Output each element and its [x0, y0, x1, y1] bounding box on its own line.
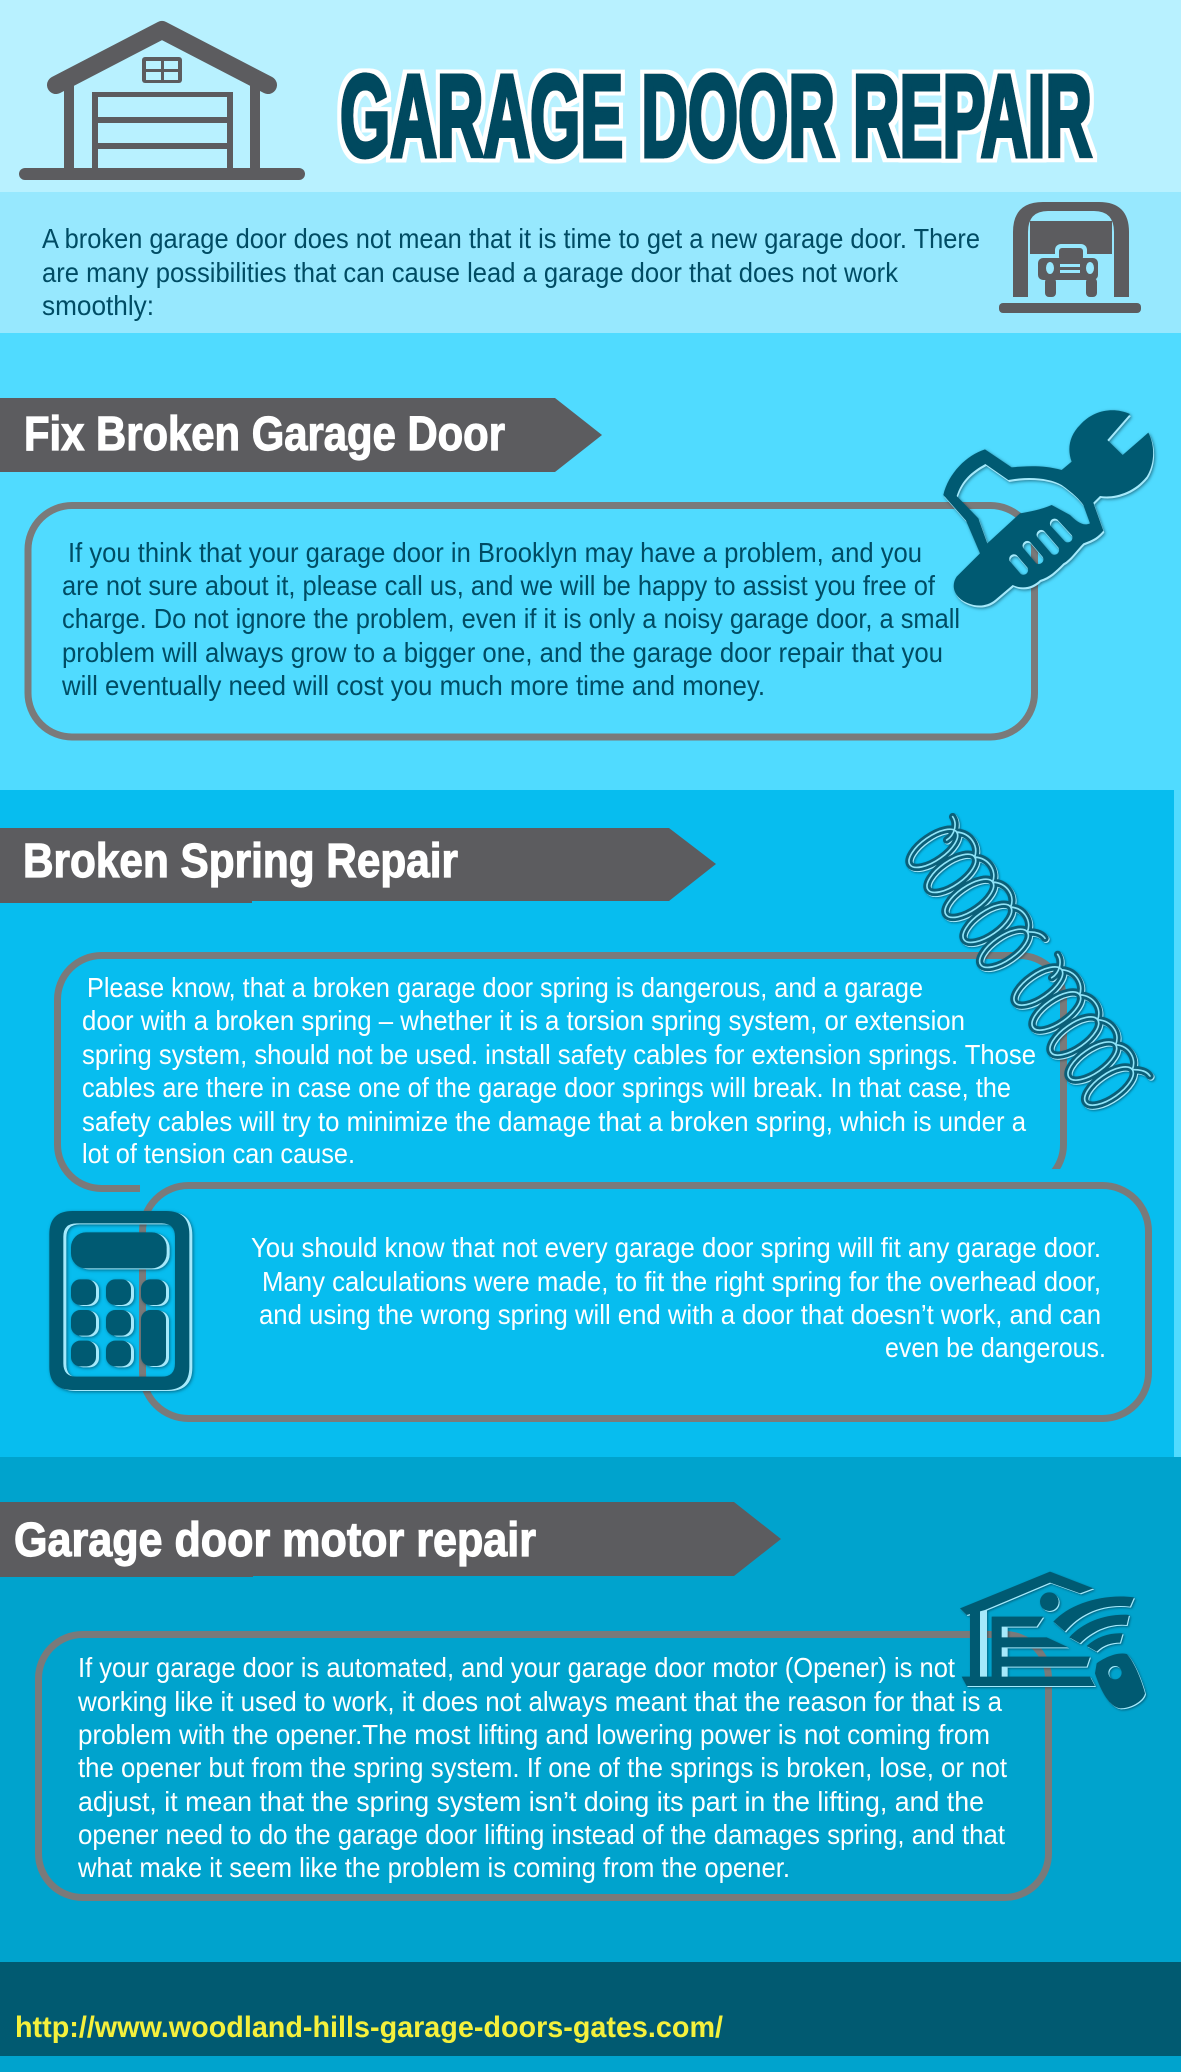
heading banner: broken spring repair: Broken Spring Repair	[23, 835, 458, 888]
icon: broken spring, upper part	[909, 817, 1045, 967]
body text: motor repair	[77, 1652, 1007, 1883]
mask strip hiding lower edge of first box	[140, 1169, 1100, 1197]
body text: broken spring danger: Please know, that a broken garage door spring is dangerous, and a garage	[87, 972, 923, 1003]
icon: car in garage door	[999, 202, 1141, 313]
body text: motor repair: what make it seem like the problem is coming from the opener.	[77, 1852, 790, 1883]
footer url: http://www.woodland-hills-garage-doors-gates.com/	[15, 2011, 724, 2044]
intro background	[0, 192, 1181, 333]
header background	[0, 0, 1181, 192]
panel: fix broken garage door	[0, 398, 1153, 737]
body text: fix broken garage door: are not sure about it, please call us, and we will be happy to assist you free of	[62, 570, 935, 601]
rounded text box outline	[28, 506, 1034, 737]
heading banner: garage door motor repair	[0, 1502, 781, 1577]
body text: broken spring danger: door with a broken spring – whether it is a torsion spring system, or extension	[82, 1005, 965, 1036]
heading banner: garage door motor repair: Garage door motor repair	[14, 1514, 536, 1567]
intro text: A broken garage door does not mean that it is time to get a new garage door. There	[42, 223, 980, 254]
body text: broken spring danger: safety cables will try to minimize the damage that a broken spring, which is under a	[82, 1106, 1027, 1137]
section sliver at right edge	[1174, 790, 1181, 1457]
section background: garage door motor repair	[0, 1457, 1181, 2072]
body text: motor repair: adjust, it mean that the spring system isn’t doing its part in the lifting, and the	[78, 1786, 984, 1817]
body text: fix broken garage door: charge. Do not ignore the problem, even if it is only a noisy garage door, a small	[62, 603, 960, 634]
body text: motor repair: working like it used to work, it does not always meant that the reason for that is a	[77, 1686, 1003, 1717]
rounded text box outline: dangerous spring	[58, 956, 1064, 1188]
body text: fix broken garage door: problem will always grow to a bigger one, and the garage door repair that you	[62, 637, 943, 668]
rounded text box outline: spring calculations	[142, 1186, 1148, 1418]
intro text: smoothly:	[42, 290, 154, 321]
rounded text box outline	[38, 1634, 1048, 1898]
panel: broken spring repair	[0, 817, 1150, 1418]
icon: broken spring, lower part	[1014, 954, 1150, 1105]
section background: broken spring repair	[0, 790, 1174, 1457]
intro text: are many possibilities that can cause lead a garage door that does not work	[42, 257, 898, 288]
icon: hand holding wrench	[943, 410, 1153, 606]
intro text	[42, 223, 980, 321]
icon: calculator	[49, 1211, 189, 1390]
body text: broken spring danger: lot of tension can cause.	[82, 1138, 355, 1169]
body text: spring fit: even be dangerous.	[885, 1332, 1106, 1363]
section background: fix broken garage door	[0, 333, 1181, 790]
icon: automated garage with remote	[960, 1572, 1145, 1708]
body text: motor repair: problem with the opener.The most lifting and lowering power is not coming from	[78, 1719, 990, 1750]
heading banner: broken spring repair	[0, 828, 716, 903]
body text: broken spring danger: cables are there in case one of the garage door springs will break. In that case, the	[82, 1072, 1011, 1103]
heading banner: fix broken garage door	[0, 398, 602, 472]
icon: house with garage door	[19, 30, 305, 180]
body text: motor repair: the opener but from the spring system. If one of the springs is broken, lose, or not	[78, 1752, 1007, 1783]
footer band	[0, 1962, 1181, 2056]
body text: motor repair: If your garage door is automated, and your garage door motor (Opener) is not	[78, 1652, 955, 1683]
body text: fix broken garage door: will eventually need will cost you much more time and money.	[61, 670, 765, 701]
heading banner: fix broken garage door: Fix Broken Garage Door	[24, 408, 505, 461]
body text: broken spring danger	[82, 972, 1036, 1169]
body text: broken spring danger: spring system, should not be used. install safety cables for extension springs. Those	[82, 1039, 1036, 1070]
panel: garage door motor repair	[0, 1502, 1145, 1898]
body text: motor repair: opener need to do the garage door lifting instead of the damages spring, and that	[78, 1819, 1005, 1850]
body text: fix broken garage door	[61, 537, 960, 701]
body text: spring fit	[251, 1232, 1106, 1363]
body text: spring fit: You should know that not every garage door spring will fit any garage door.	[251, 1232, 1101, 1263]
body text: spring fit: Many calculations were made, to fit the right spring for the overhead door,	[262, 1266, 1101, 1297]
body text: spring fit: and using the wrong spring will end with a door that doesn’t work, and can	[259, 1299, 1101, 1330]
body text: fix broken garage door: If you think that your garage door in Brooklyn may have a problem, and you	[68, 537, 922, 568]
